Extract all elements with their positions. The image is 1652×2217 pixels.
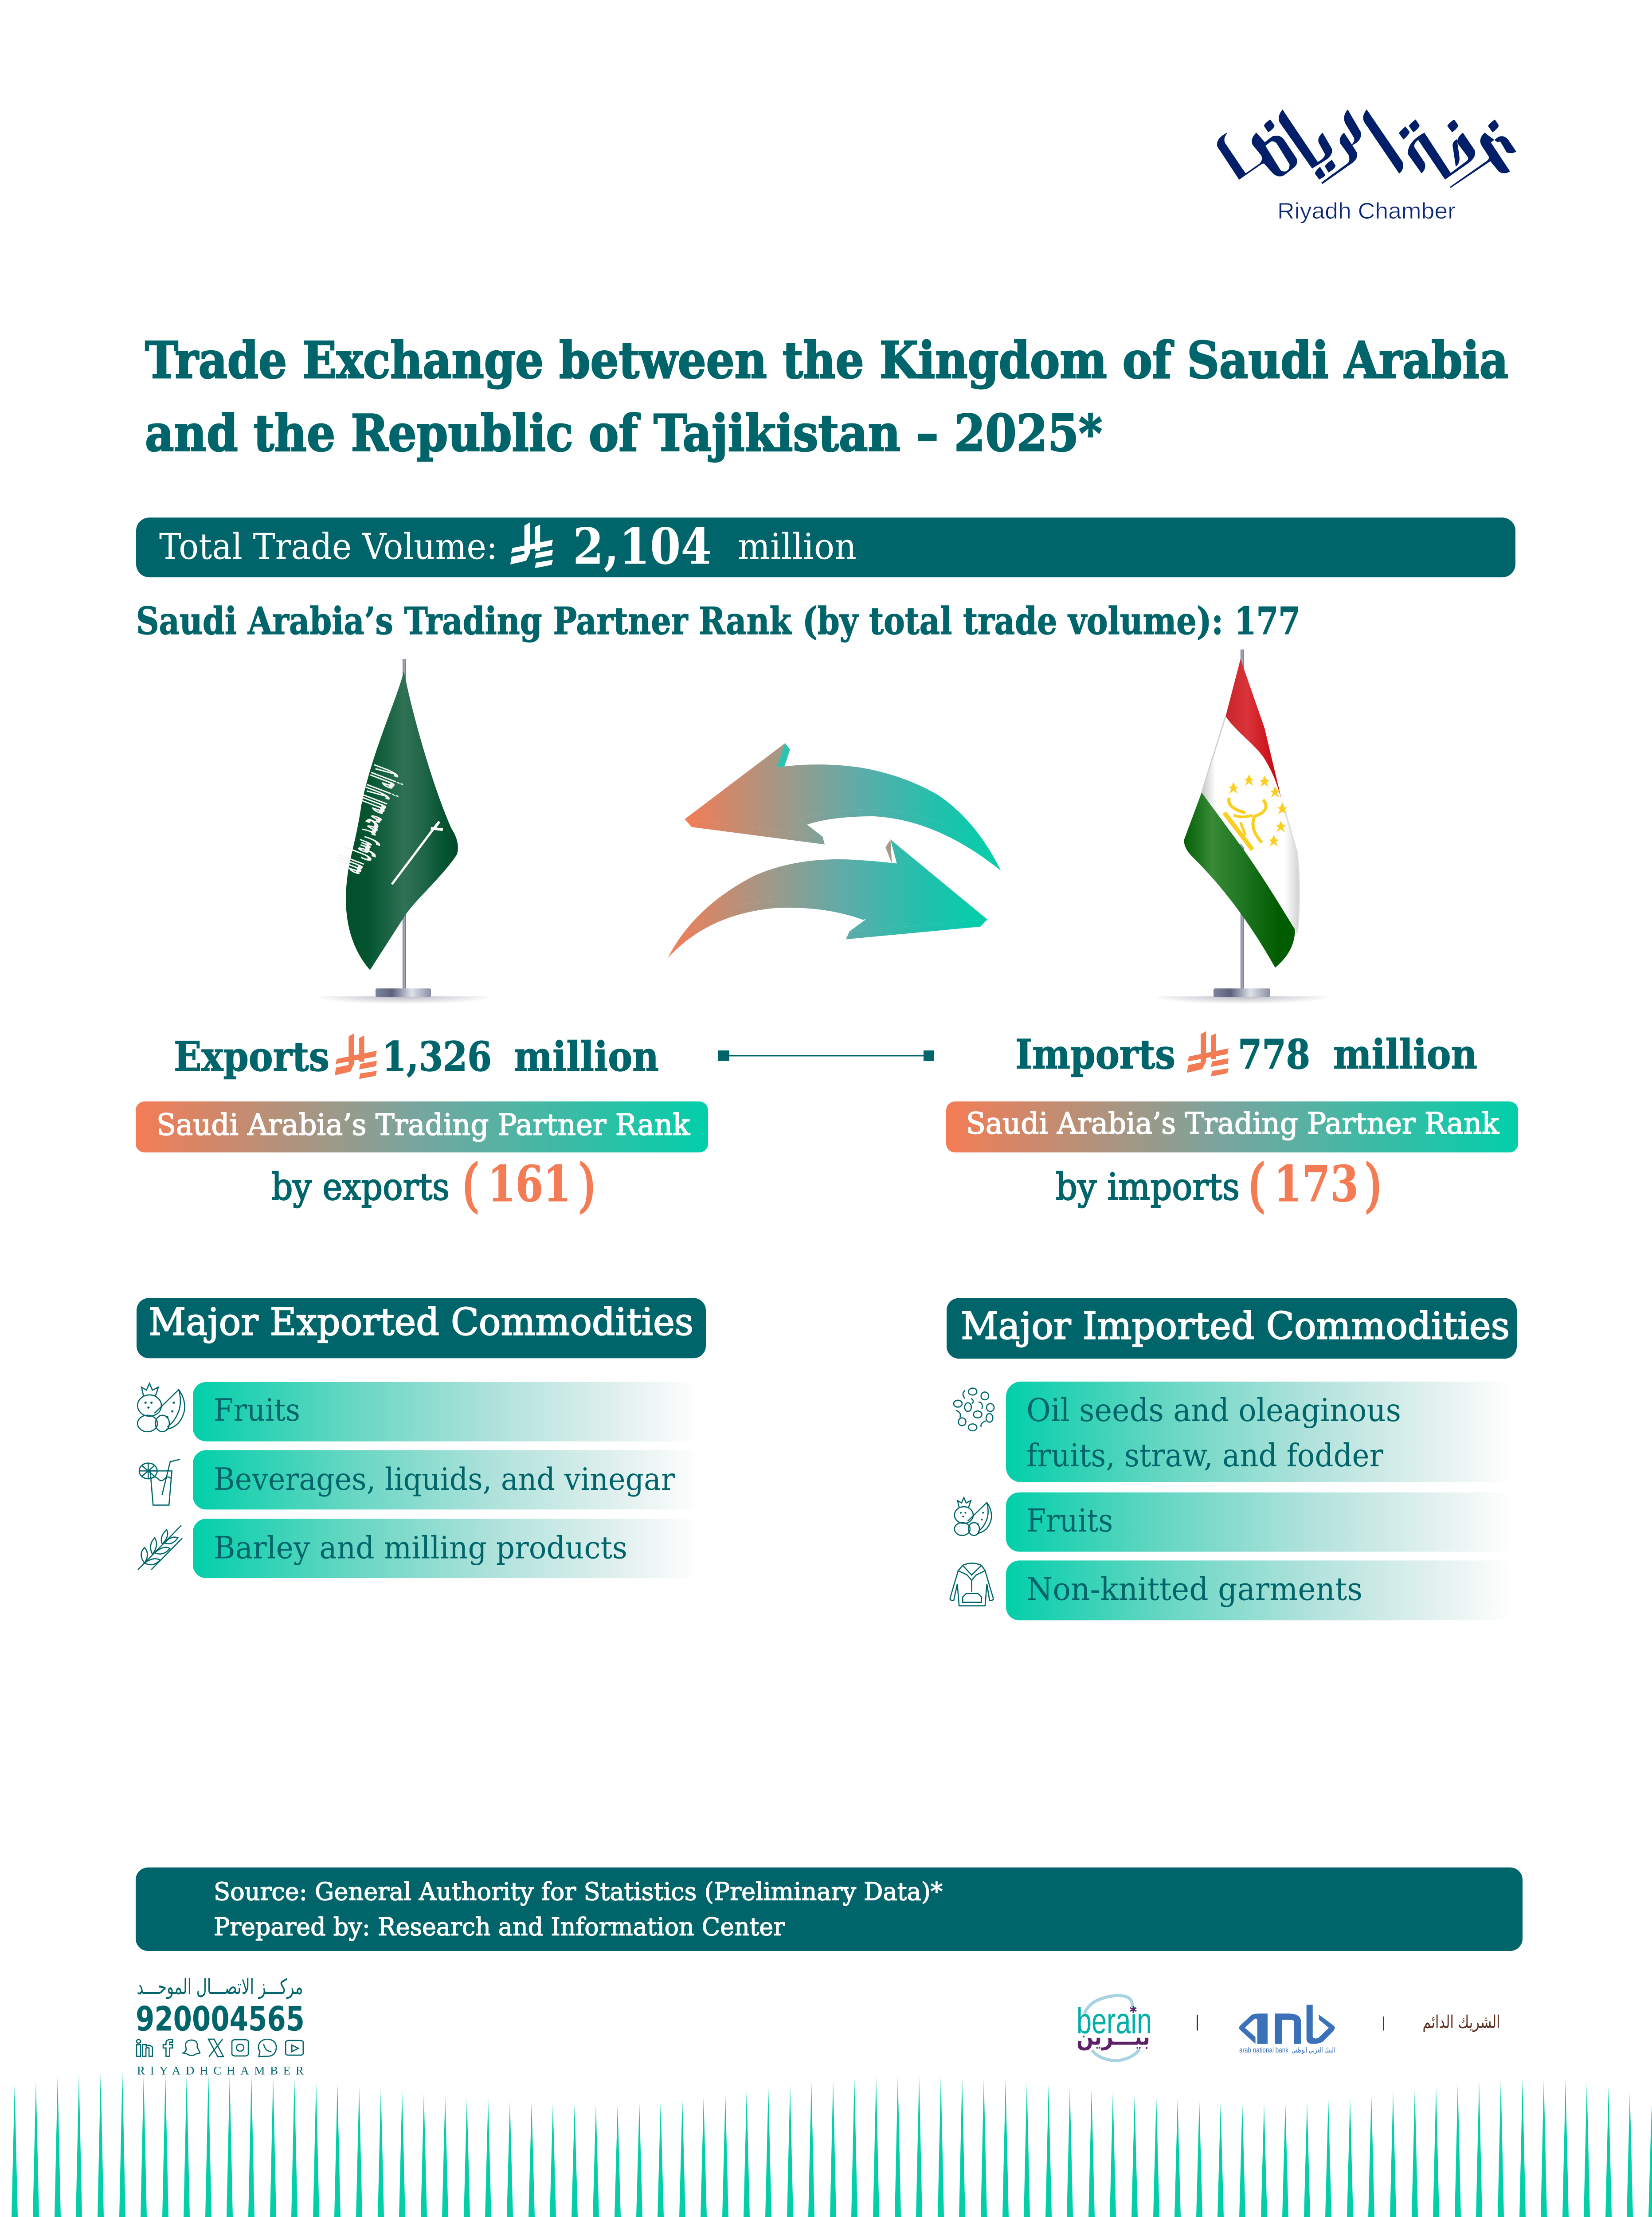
row: barley: Barley and milling products xyxy=(214,1530,627,1566)
row: fruits: Fruits xyxy=(1026,1502,1113,1539)
panel: major exported commodities xyxy=(137,1298,706,1578)
separator xyxy=(1197,2015,1198,2031)
imports value: Imports xyxy=(1015,1030,1175,1078)
exports value xyxy=(174,1033,659,1081)
rank value: 173: 173 xyxy=(1274,1156,1358,1213)
row: fruits xyxy=(193,1382,701,1441)
flag pole and base xyxy=(1214,650,1270,997)
panel: source note xyxy=(136,1868,1523,1951)
heading: exported commodities: Major Exported Commodities xyxy=(149,1300,693,1344)
connector between exports and imports xyxy=(718,1050,934,1061)
logo mark: Arabic calligraphy xyxy=(1217,110,1516,188)
row: oil seeds xyxy=(1006,1382,1514,1482)
row: garments xyxy=(1006,1560,1514,1620)
panel: total trade volume bar: Total Trade Volume: xyxy=(159,526,497,568)
rank value: 161: 161 xyxy=(488,1156,571,1213)
arrows: two-way trade exchange xyxy=(668,743,1001,958)
row: barley xyxy=(193,1519,701,1578)
logo: arab national bank: البنك العربي الوطني xyxy=(1292,2045,1335,2055)
panel: imports rank: by imports xyxy=(1056,1165,1240,1208)
row: oil seeds: Oil seeds and oleaginous xyxy=(1026,1391,1401,1429)
flag: Saudi Arabia xyxy=(319,659,489,1011)
title xyxy=(145,330,1508,462)
panel: imports rank xyxy=(946,1101,1518,1218)
row: garments: Non-knitted garments xyxy=(1026,1571,1362,1608)
imports value: million xyxy=(1333,1030,1477,1078)
separator xyxy=(1383,2017,1384,2031)
icon: oil seeds xyxy=(954,1388,994,1431)
flag pole shadow xyxy=(1157,996,1327,1011)
icon: garment xyxy=(950,1563,993,1606)
arrow: pointing right xyxy=(668,839,987,958)
rank value: 173: ) xyxy=(1364,1153,1382,1218)
icon: fruits xyxy=(955,1498,991,1535)
panel: source note: Prepared by: Research and Information Center xyxy=(214,1913,785,1941)
text: phone number: 920004565 xyxy=(136,2000,305,2038)
logo: berain xyxy=(1077,1995,1152,2061)
row: beverages: Beverages, liquids, and vinegar xyxy=(214,1461,675,1497)
rank value: 173: ( xyxy=(1248,1153,1266,1218)
exports value: 1,326 xyxy=(382,1033,492,1081)
text: permanent partner: الشريك الدائم xyxy=(1422,2012,1500,2033)
text: unified contact center: مركـــز الاتصـــال الموحـــد xyxy=(137,1975,303,1999)
icons: social media xyxy=(137,2039,303,2056)
row: fruits xyxy=(1006,1492,1514,1552)
text: riyadhchamber handle: RIYADHCHAMBER xyxy=(137,2064,304,2077)
flag pole shadow xyxy=(319,996,489,1011)
contact block xyxy=(136,1975,305,2077)
icon: fruits xyxy=(137,1383,184,1432)
icon: riyal symbol white xyxy=(510,522,553,568)
text: overall trading partner rank: Saudi Arabia’s Trading Partner Rank (by total trade volume): 177 xyxy=(136,599,1300,643)
text: لا إله إلا الله محمد رسول الله xyxy=(330,761,407,878)
logo: Riyadh Chamber xyxy=(1217,110,1516,223)
water ring xyxy=(1084,1995,1139,2061)
title: Trade Exchange between the Kingdom of Saudi Arabia xyxy=(145,330,1508,390)
row: fruits: Fruits xyxy=(214,1392,300,1428)
flag pole and base xyxy=(376,659,431,997)
panel: imports rank: Saudi Arabia’s Trading Partner Rank xyxy=(966,1106,1499,1140)
panel: major imported commodities xyxy=(947,1298,1517,1620)
panel: source note: Source: General Authority for Statistics (Preliminary Data)* xyxy=(214,1877,943,1906)
title: and the Republic of Tajikistan – 2025* xyxy=(145,403,1102,462)
icon: riyal symbol orange xyxy=(335,1033,377,1079)
imports value: 778 xyxy=(1238,1030,1310,1078)
panel: exports rank: Saudi Arabia’s Trading Partner Rank xyxy=(157,1108,690,1142)
icon: riyal symbol orange xyxy=(1187,1031,1229,1077)
flag: Tajikistan xyxy=(1157,650,1327,1011)
icon: wheat xyxy=(138,1525,182,1570)
emblem: crown and stars xyxy=(1224,774,1287,850)
panel: total trade volume bar: million xyxy=(738,526,857,568)
rank value: 161: ) xyxy=(578,1153,596,1218)
decorative stripes along the bottom edge xyxy=(12,2072,1652,2217)
panel: exports rank: by exports xyxy=(271,1165,450,1208)
star xyxy=(1130,2006,1136,2013)
flag cloth xyxy=(1184,659,1300,967)
heading: imported commodities xyxy=(947,1298,1517,1359)
arrow: pointing left xyxy=(685,743,1001,871)
imports value xyxy=(1015,1030,1477,1078)
row: oil seeds: fruits, straw, and fodder xyxy=(1026,1437,1384,1474)
logo: arab national bank xyxy=(1239,2005,1335,2055)
logo: berain: berain xyxy=(1077,2001,1152,2041)
logo: arab national bank: arab national bank xyxy=(1239,2046,1288,2054)
logo wordmark: Riyadh Chamber xyxy=(1277,198,1456,223)
heading: imported commodities: Major Imported Commodities xyxy=(961,1304,1510,1348)
rank value: 161: ( xyxy=(462,1153,480,1218)
panel: total trade volume bar: 2,104 xyxy=(573,517,712,576)
exports value: million xyxy=(514,1033,659,1081)
icon: beverage xyxy=(139,1459,180,1505)
logo: berain: بيـــرين xyxy=(1077,2022,1150,2050)
rank value: 173 xyxy=(1248,1153,1382,1218)
panel: exports rank xyxy=(136,1101,708,1218)
flag cloth xyxy=(346,671,458,970)
rank value: 161 xyxy=(462,1153,596,1218)
row: beverages xyxy=(193,1450,701,1509)
exports value: Exports xyxy=(174,1033,329,1081)
panel: total trade volume bar xyxy=(136,517,1515,577)
